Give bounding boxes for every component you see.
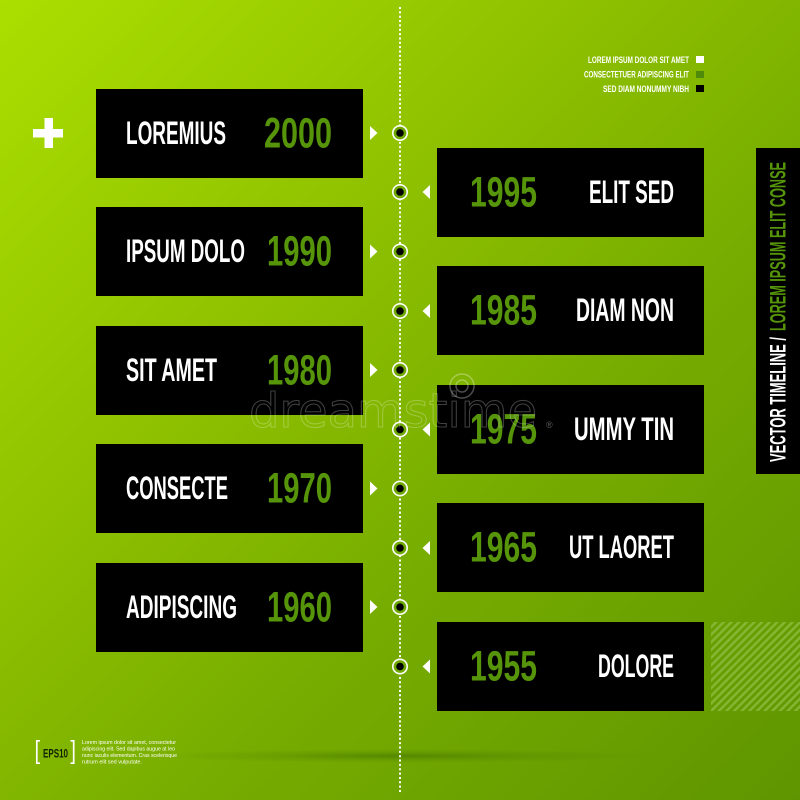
node 1975 — [393, 422, 407, 437]
year: 1960 — [267, 584, 332, 632]
panel: 1955 — [437, 622, 704, 711]
legend item: black: SED DIAM NONUMMY NIBH — [603, 84, 689, 95]
year: 1970 — [267, 464, 332, 512]
panel: 1960 — [96, 563, 363, 652]
year: 1985 — [470, 286, 537, 334]
node 1980 — [393, 363, 407, 377]
panel: 1980 — [96, 326, 363, 415]
panel: 2000 — [96, 89, 363, 178]
footnote — [82, 740, 177, 766]
label: IPSUM DOLO — [126, 233, 245, 269]
watermark spiral logo — [450, 374, 474, 398]
year: 1990 — [267, 228, 332, 276]
node 1955 — [393, 659, 407, 674]
EPS label: EPS10 — [43, 746, 68, 760]
watermark wordmark: dreamstime — [249, 384, 537, 439]
ground shadow — [150, 749, 650, 763]
watermark registered mark: ® — [546, 420, 553, 430]
node 1985 — [393, 304, 407, 318]
year: 1995 — [470, 168, 537, 216]
side title text: white: VECTOR TIMELINE / — [766, 337, 790, 462]
panel: 1990 — [96, 207, 363, 296]
footnote: Lorem ipsum dolor sit amet, consectetur — [82, 740, 176, 746]
label: DIAM NON — [576, 292, 674, 328]
panel: 1995 — [437, 148, 704, 237]
year: 1955 — [470, 642, 537, 690]
icon: plus — [33, 118, 63, 148]
node 1995 — [393, 185, 407, 199]
side title text: green: LOREM IPSUM ELIT CONSE — [766, 162, 790, 331]
label: UMMY TIN — [574, 411, 674, 447]
year: 2000 — [264, 110, 332, 158]
node 1990 — [393, 244, 407, 259]
label: LOREMIUS — [126, 115, 226, 151]
node 1965 — [393, 541, 407, 555]
node 2000 — [393, 126, 407, 140]
timeline dotted axis — [399, 7, 401, 794]
year: 1965 — [470, 524, 537, 572]
panel: 1985 — [437, 266, 704, 355]
footnote: nunc iaculis elementum. Cras scelerisque — [82, 753, 177, 759]
label: ELIT SED — [589, 174, 674, 210]
panel: 1975 — [437, 385, 704, 474]
footnote: rutrum elit sed vulputate. — [82, 760, 142, 766]
panel: 1965 — [437, 503, 704, 592]
label: UT LAORET — [569, 529, 674, 565]
brackets — [37, 741, 74, 763]
legend item: green: CONSECTETUER ADIPISCING ELIT — [584, 70, 689, 80]
label: CONSECTE — [126, 470, 228, 506]
panel: 1970 — [96, 444, 363, 533]
watermark — [249, 374, 553, 439]
legend — [584, 55, 704, 95]
EPS badge — [37, 741, 74, 763]
label: ADIPISCING — [126, 589, 237, 625]
arrows: left panels — [370, 126, 378, 614]
year: 1980 — [267, 346, 332, 394]
side title panel — [756, 148, 800, 474]
node 1970 — [393, 481, 407, 496]
hatched decoration — [711, 622, 800, 711]
footnote: adipiscing elit. Sed dapibus augue at leo — [82, 746, 175, 752]
timeline nodes — [393, 126, 407, 674]
year: 1975 — [470, 406, 537, 454]
node 1960 — [393, 600, 407, 614]
label: SIT AMET — [126, 352, 217, 388]
legend item: white: LOREM IPSUM DOLOR SIT AMET — [588, 55, 689, 66]
label: DOLORE — [598, 648, 674, 684]
arrows: right panels — [422, 185, 430, 674]
